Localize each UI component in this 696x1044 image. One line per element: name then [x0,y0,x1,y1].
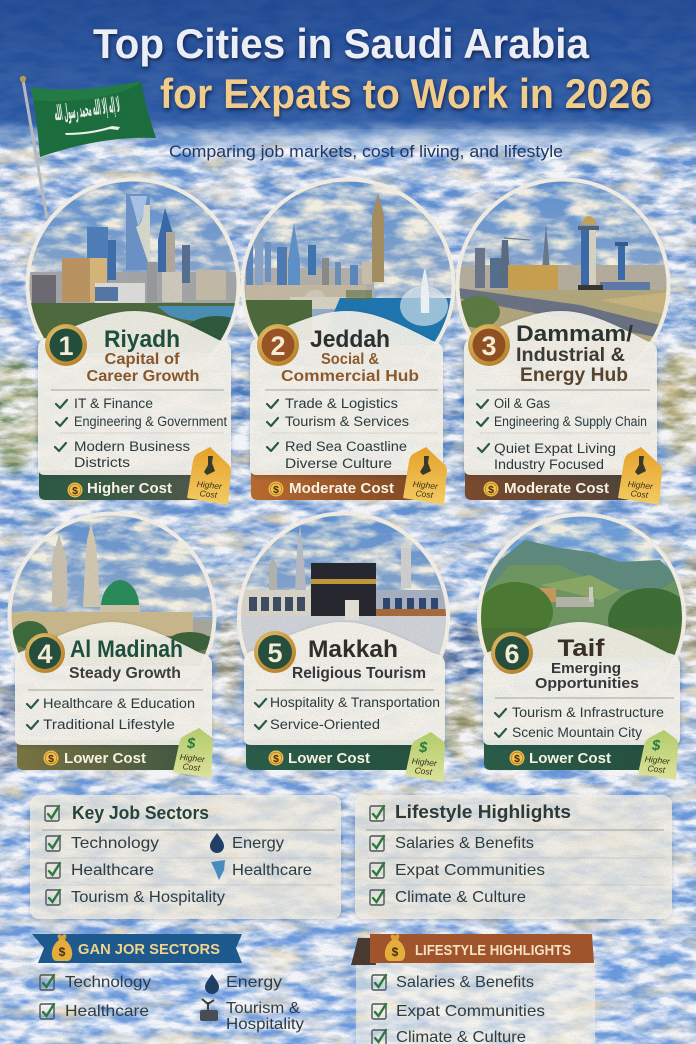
city name and tagline: Emerging [551,660,621,677]
city name and tagline: Social & [321,351,379,368]
card 3: Dammam [456,178,670,505]
job and lifestyle list [27,696,195,732]
sector list: Energy [232,835,284,852]
lower sector list: Healthcare [65,1003,149,1020]
cost band [251,470,442,500]
lower sector list: Energy [226,974,282,991]
panel: lifestyle highlights [355,795,672,919]
city name and tagline: Capital of [104,351,180,368]
cost tag [618,447,662,505]
number badge 4: 4 [37,639,53,669]
cost tag: Higher [196,479,223,491]
city name and tagline: Commercial Hub [281,368,419,385]
job and lifestyle list [495,705,664,740]
job and lifestyle list: Red Sea Coastline [285,439,407,454]
cost band [246,740,440,770]
city name and tagline: Taif [558,635,606,662]
cost tag [405,732,445,782]
text: لا إله إلا الله محمد رسول الله [53,93,121,126]
job and lifestyle list [55,396,227,470]
number badge 1: 1 [58,331,74,361]
number badge 5 [254,631,296,673]
city name and tagline: Religious Tourism [292,665,426,682]
subtitle: Comparing job markets, cost of living, and lifestyle [169,142,563,161]
icon: Saudi flag on pole [20,76,156,218]
heading: Lifestyle Highlights [395,802,571,822]
city illustration: Riyadh skyline [30,182,236,353]
lifestyle list [370,835,545,906]
banner: lifestyle highlights ribbon: LIFESTYLE HIGHLIGHTS [415,943,571,959]
cost band [17,740,205,770]
number badge 3 [468,324,510,366]
cost tag: $ [418,739,428,756]
title [93,20,652,117]
card body [464,311,657,475]
circle frame [10,514,214,718]
lifestyle list: Climate & Culture [395,889,526,906]
city name and tagline [86,326,200,385]
sector list: Healthcare [232,862,312,879]
sector list: Tourism & Hospitality [71,889,225,906]
job and lifestyle list: Modern Business [74,439,190,454]
number badge 3: 3 [481,331,497,361]
card body [15,622,212,745]
circle frame [28,180,238,390]
job and lifestyle list: IT & Finance [74,396,153,411]
city name and tagline: Opportunities [535,675,639,692]
job and lifestyle list: Service-Oriented [270,717,380,732]
cost tag: Cost [414,765,433,777]
icon: panel checkbox [45,806,59,821]
cost tag [173,728,213,778]
job and lifestyle list: Oil & Gas [494,396,550,411]
card 1: Riyadh [27,178,247,505]
job and lifestyle list: Quiet Expat Living [494,441,616,456]
city name and tagline: Steady Growth [69,665,181,682]
card 4: Al Madinah [8,512,217,778]
card body [38,311,231,475]
number badge 6 [491,632,533,674]
cost tag: Cost [182,761,201,773]
city name and tagline: Energy Hub [520,365,628,386]
cost tag: Cost [415,488,434,500]
job and lifestyle list: Tourism & Services [285,414,409,429]
lower sector list: Hospitality [226,1016,304,1033]
card 6: Taif [477,513,692,780]
cost band: Lower Cost [64,751,146,767]
lifestyle list: Expat Communities [395,862,545,879]
city illustration: Taif mountains [481,516,682,658]
icon: panel checkbox [370,806,384,821]
cost tag: Cost [647,763,666,775]
cost band [39,470,228,500]
cost band: Lower Cost [529,751,611,767]
lower sector list [40,974,304,1033]
banner: job sectors ribbon: GAN JOR SECTORS [78,941,220,958]
sector list [46,833,312,906]
panel: lower lifestyle highlights [356,960,595,1044]
city name and tagline [69,636,183,682]
banner: job sectors ribbon [32,934,242,963]
circle frame [242,180,454,390]
cost band: Moderate Cost [504,481,609,497]
circle frame [458,180,668,390]
sector list: Healthcare [71,862,154,879]
cost tag [638,730,678,780]
cost band [484,740,660,770]
job and lifestyle list: Healthcare & Education [43,696,195,711]
card body [483,622,680,745]
job and lifestyle list: Diverse Culture [285,456,392,471]
icon: tourism plant [200,999,218,1021]
job and lifestyle list: Industry Focused [494,457,604,472]
cost tag: Higher [411,756,438,768]
lower lifestyle list: Expat Communities [396,1003,545,1020]
cost tag: Higher [644,754,671,766]
cost tag: Higher [179,752,206,764]
cost tag: $ [651,737,661,754]
city name and tagline: Career Growth [86,368,200,385]
lower sector list: Tourism & [226,1000,300,1017]
city name and tagline: Riyadh [104,326,180,353]
cost tag [403,447,447,505]
card body [244,622,445,745]
number badge 2: 2 [270,331,286,361]
cost tag: $ [186,735,196,752]
city name and tagline [292,636,426,682]
cost tag: Higher [412,479,439,491]
number badge 6: 6 [504,639,520,669]
number badge 2 [257,324,299,366]
city name and tagline: Industrial & [516,345,625,366]
city illustration: Kaaba and Grand Mosque [241,516,446,655]
city name and tagline [516,321,633,386]
cost tag: Cost [630,488,649,500]
number badge 5: 5 [267,638,283,668]
lifestyle list: Salaries & Benefits [395,835,534,852]
number badge 1 [45,324,87,366]
job and lifestyle list: Scenic Mountain City [512,725,642,740]
sector list: Technology [71,835,159,852]
city illustration: Prophet's Mosque [8,512,217,666]
job and lifestyle list: Engineering & Supply Chain [494,414,647,429]
city name and tagline [535,635,639,692]
city name and tagline [281,326,419,385]
circle frame [479,514,684,720]
cost band: Higher Cost [87,481,172,497]
city name and tagline: Al Madinah [70,636,183,663]
card 5: Makkah [236,514,450,782]
job and lifestyle list: Traditional Lifestyle [43,717,175,732]
cost band: Lower Cost [288,751,370,767]
job and lifestyle list: Tourism & Infrastructure [512,705,664,720]
cost tag: Higher [627,479,654,491]
cost band: Moderate Cost [289,481,394,497]
circle frame [239,514,448,722]
city illustration: Jeddah waterfront [244,182,452,345]
card 2: Jeddah [242,178,456,505]
cost tag: Cost [199,488,218,500]
title line 2: for Expats to Work in 2026 [160,70,652,117]
job and lifestyle list [267,396,409,471]
title line 1: Top Cities in Saudi Arabia [93,20,590,67]
city name and tagline: Dammam/ [516,321,633,346]
city illustration: Dammam industry [460,182,666,342]
job and lifestyle list: Districts [74,455,130,470]
city name and tagline: Jeddah [310,326,390,353]
heading: Key Job Sectors [72,803,209,823]
lower sector list: Technology [65,974,151,991]
job and lifestyle list [477,396,647,472]
lower lifestyle list [372,974,545,1044]
banner: lifestyle highlights ribbon [351,934,594,965]
cost band [465,470,656,500]
job and lifestyle list: Trade & Logistics [285,396,398,411]
job and lifestyle list: Engineering & Government [74,414,227,429]
cost tag [187,447,231,505]
number badge 4 [25,633,65,673]
job and lifestyle list: Hospitality & Transportation [270,695,440,710]
job and lifestyle list [255,695,440,732]
city name and tagline: Makkah [308,636,398,663]
panel: key job sectors [30,795,341,919]
lower lifestyle list: Salaries & Benefits [396,974,534,991]
card body [250,311,443,475]
